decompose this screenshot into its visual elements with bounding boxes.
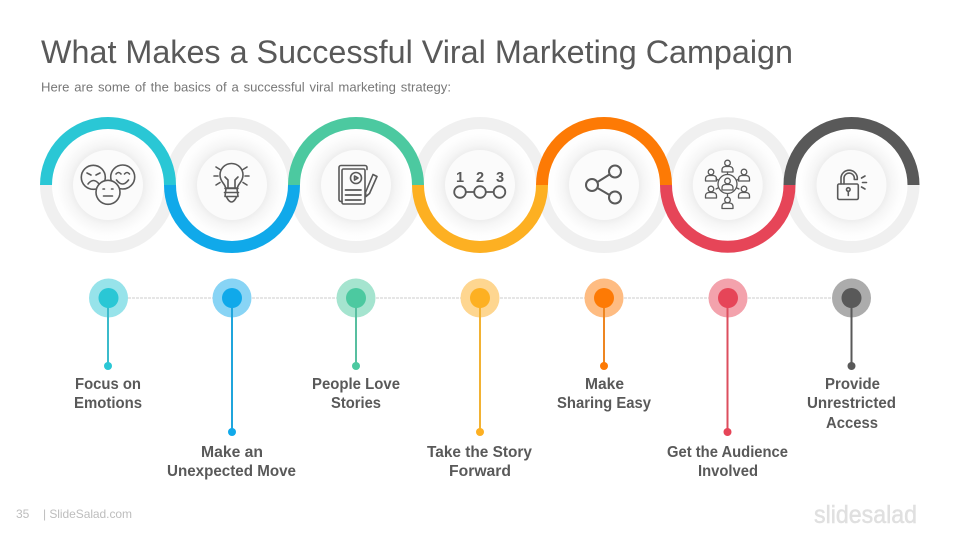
page number: 35 bbox=[16, 507, 30, 521]
arc: blue bbox=[170, 185, 294, 247]
label: Make Sharing Easy: Sharing Easy bbox=[557, 395, 651, 412]
logo wordmark: slidesalad bbox=[814, 501, 917, 529]
label: Get the Audience Involved: Involved bbox=[698, 463, 758, 480]
timeline marker 5 bbox=[584, 278, 624, 370]
subtitle: Here are some of the basics of a successful viral marketing strategy: bbox=[41, 80, 451, 94]
icon: numbered steps: 2 bbox=[476, 170, 484, 186]
icon: light bulb bbox=[214, 164, 249, 202]
label: Make Sharing Easy bbox=[557, 376, 651, 412]
icon: share bbox=[586, 166, 621, 204]
arc: green bbox=[294, 123, 418, 185]
label: Provide Unrestricted Access bbox=[807, 376, 896, 432]
label: People Love Stories bbox=[312, 376, 400, 412]
label: Make an Unexpected Move: Make an bbox=[201, 444, 263, 461]
timeline connector bbox=[108, 297, 851, 299]
timeline marker 4 bbox=[460, 278, 500, 436]
label: People Love Stories: Stories bbox=[331, 395, 381, 412]
label: People Love Stories: People Love bbox=[312, 376, 400, 393]
timeline marker 2 bbox=[212, 278, 252, 436]
arc: yellow bbox=[418, 185, 542, 247]
arc: orange bbox=[542, 123, 666, 185]
timeline marker 1 bbox=[89, 278, 128, 370]
label: Provide Unrestricted Access: Access bbox=[826, 415, 878, 432]
label: Provide Unrestricted Access: Unrestricted bbox=[807, 395, 896, 412]
panel: circle 7 bbox=[790, 129, 914, 247]
timeline marker 3 bbox=[336, 278, 376, 370]
label: Get the Audience Involved bbox=[667, 444, 788, 480]
icon: open padlock bbox=[838, 170, 866, 200]
arc: teal bbox=[46, 123, 170, 185]
label: Get the Audience Involved: Get the Audience bbox=[667, 444, 788, 461]
label: Make Sharing Easy: Make bbox=[585, 376, 624, 393]
label: Take the Story Forward bbox=[427, 444, 532, 480]
icon: audience network bbox=[706, 160, 750, 208]
label: Make an Unexpected Move bbox=[167, 444, 296, 480]
panel: circle 5 bbox=[542, 129, 666, 247]
panel: circle 2 bbox=[170, 123, 294, 241]
arc: red bbox=[666, 185, 790, 247]
icon: document with pen bbox=[339, 166, 377, 204]
arc: dark gray bbox=[790, 123, 914, 185]
title: What Makes a Successful Viral Marketing Campaign bbox=[41, 34, 793, 70]
footer source: | SlideSalad.com bbox=[43, 507, 132, 521]
label: Take the Story Forward: Forward bbox=[449, 463, 511, 480]
panel: circle 1 bbox=[46, 129, 170, 247]
icon: numbered steps: 1 bbox=[456, 170, 464, 186]
icon: three faces bbox=[81, 165, 135, 204]
label: Make an Unexpected Move: Unexpected Move bbox=[167, 463, 296, 480]
icon: numbered steps: 3 bbox=[496, 170, 504, 186]
panel: circle 6 bbox=[666, 123, 790, 241]
timeline marker 6 bbox=[708, 278, 748, 436]
panel: circle 4 bbox=[418, 123, 542, 241]
icon: numbered steps bbox=[454, 170, 505, 198]
timeline marker 7 bbox=[832, 278, 871, 370]
panel: circle 3 bbox=[294, 129, 418, 247]
label: Focus on Emotions: Focus on bbox=[75, 376, 141, 393]
label: Focus on Emotions bbox=[74, 376, 142, 412]
label: Focus on Emotions: Emotions bbox=[74, 395, 142, 412]
label: Provide Unrestricted Access: Provide bbox=[825, 376, 880, 393]
label: Take the Story Forward: Take the Story bbox=[427, 444, 532, 461]
